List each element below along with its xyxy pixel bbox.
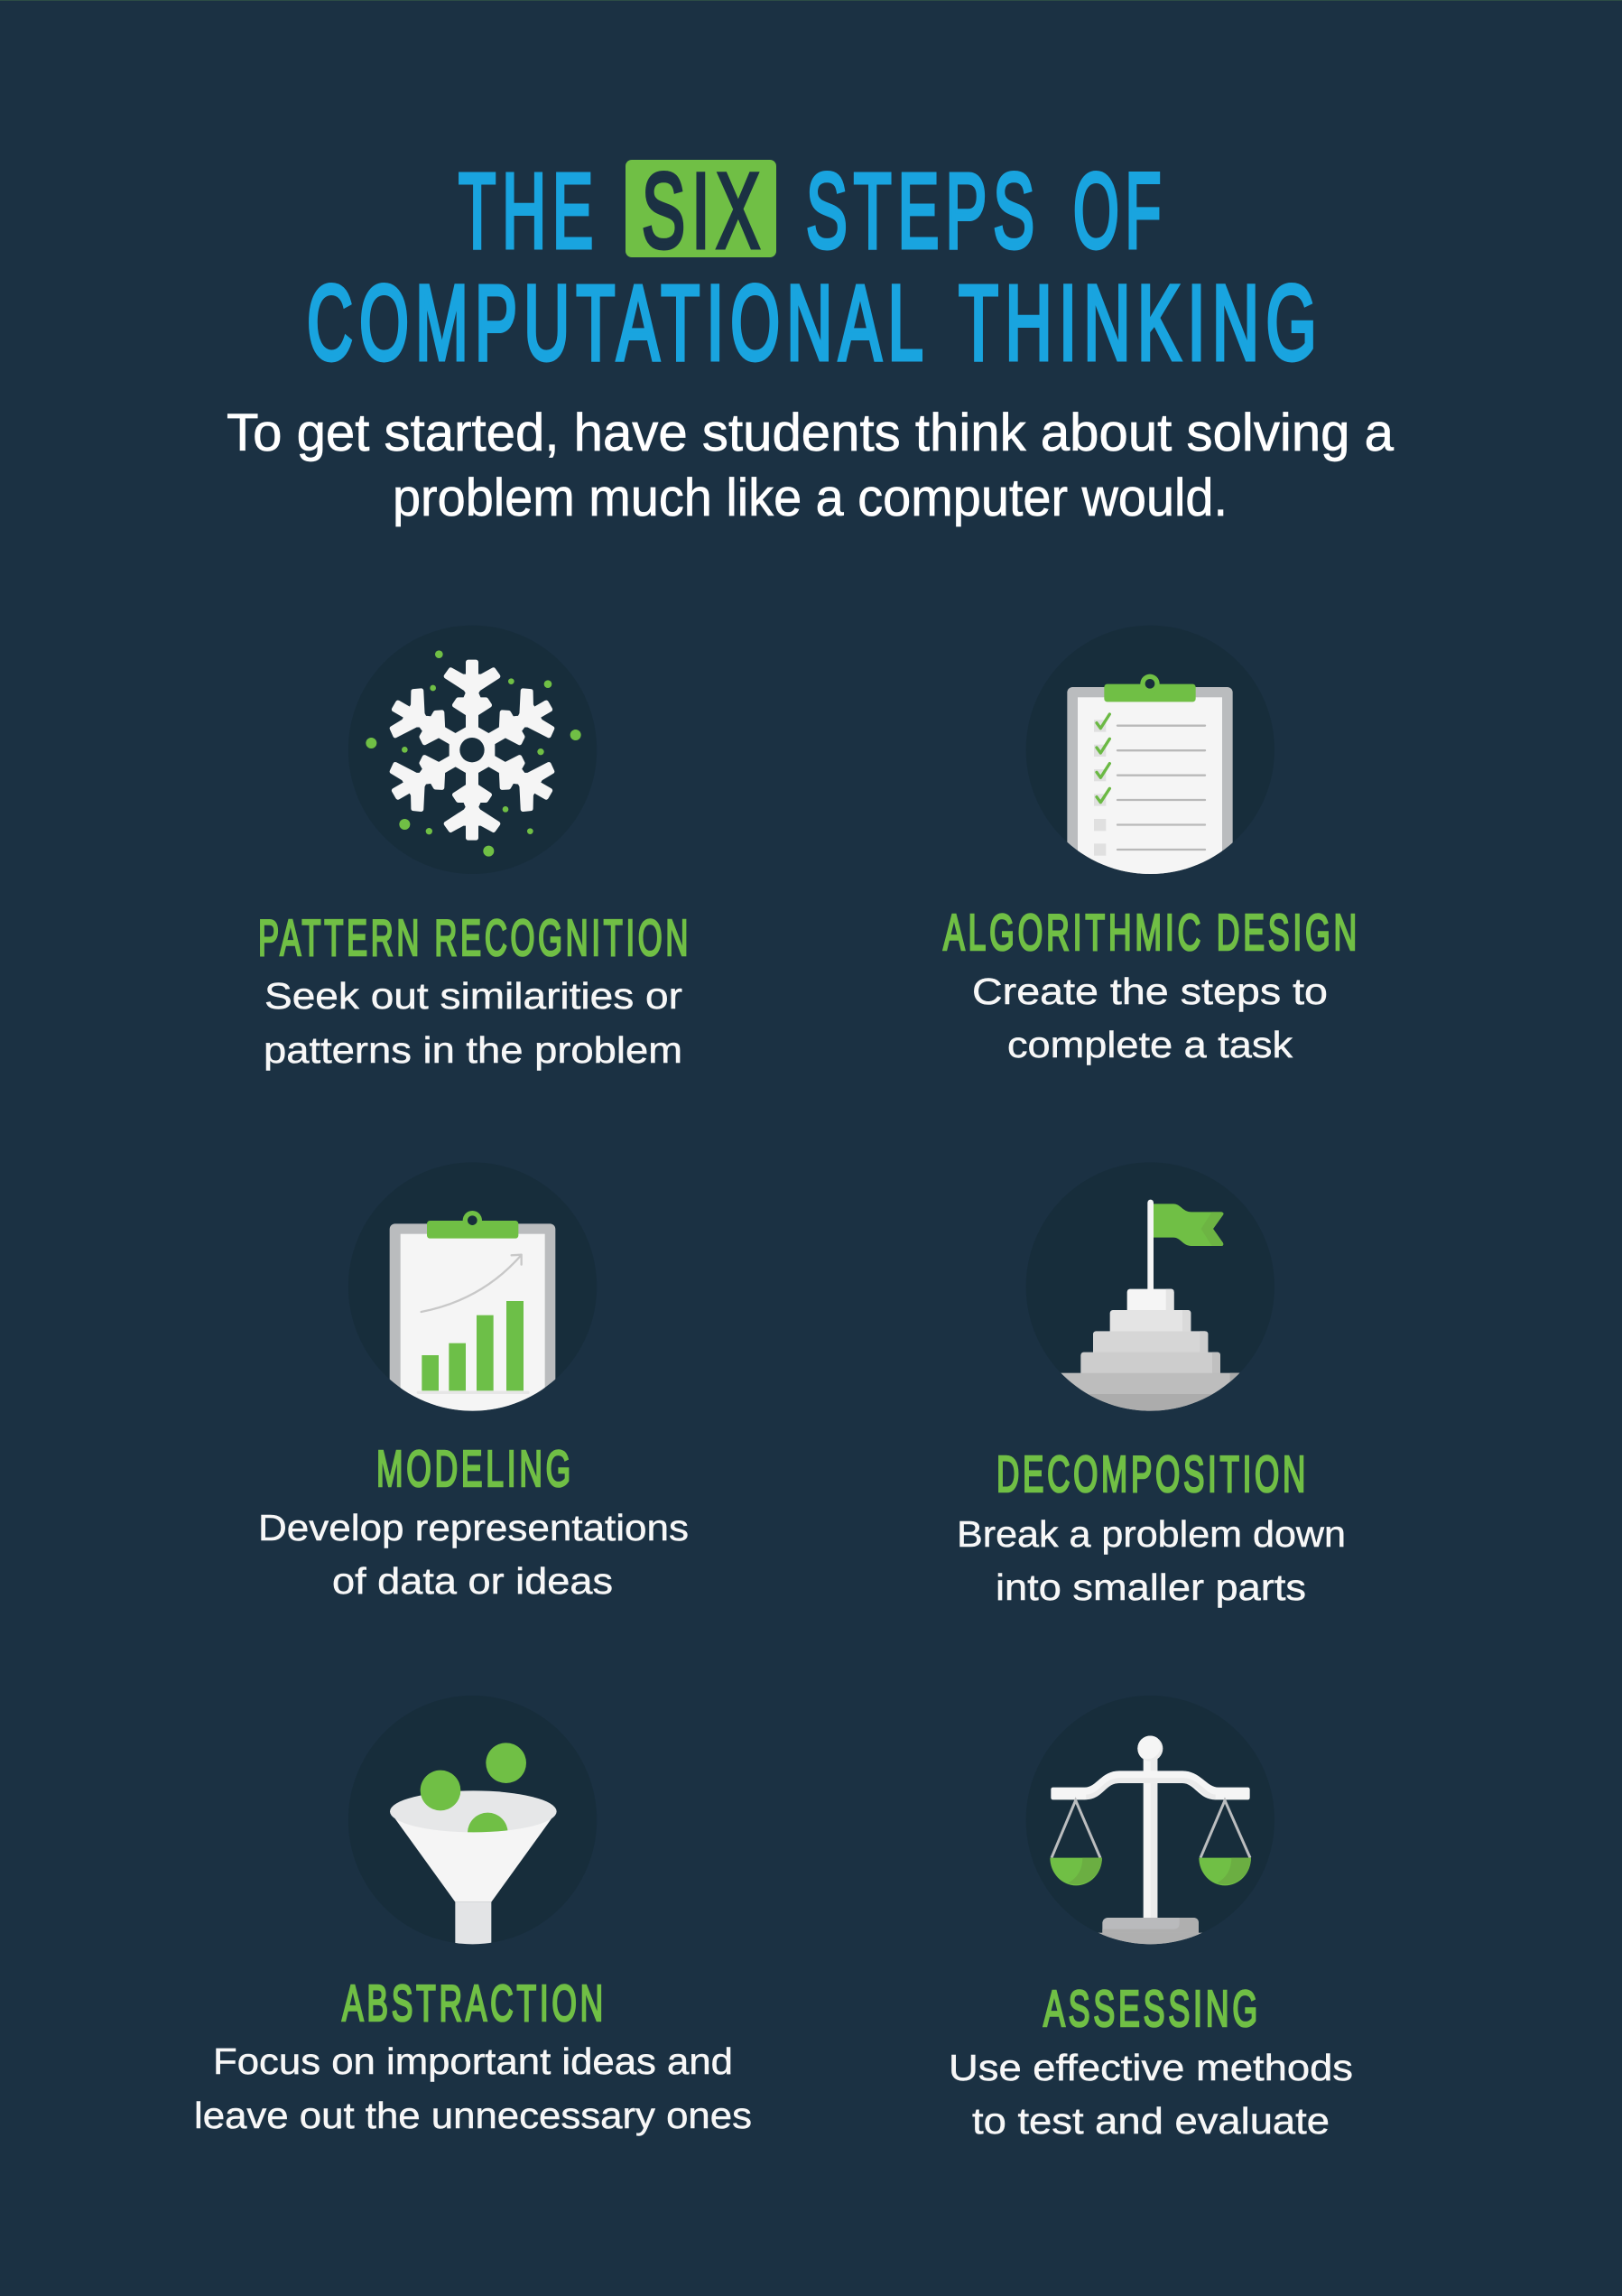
description: assessing [949,2047,1353,2142]
description: modeling: Develop representations [258,1507,689,1548]
panel: assessing [949,1696,1353,2142]
heading: assessing: ASSESSING [1043,1980,1261,2038]
description: abstraction: leave out the unnecessary ones [194,2095,752,2136]
description: pattern recognition: Seek out similarities or [264,975,682,1017]
icon: flag on stepped pyramid [1026,1162,1274,1412]
subtitle: To get started, have students think about solving a [227,404,1395,462]
description: abstraction [194,2040,752,2136]
title: COMPUTATIONAL [307,264,930,383]
description: modeling: of data or ideas [332,1560,613,1602]
highlighted word: six [626,152,776,271]
highlighted word: six: SIX [642,152,766,271]
title: OF [1073,152,1167,271]
description: abstraction: Focus on important ideas and [213,2040,733,2082]
title: THINKING [959,264,1323,383]
heading: decomposition: DECOMPOSITION [996,1445,1309,1503]
panel: abstraction [194,1696,752,2136]
heading: abstraction: ABSTRACTION [342,1975,607,2032]
description: algorithmic design: complete a task [1007,1024,1293,1065]
subtitle [227,404,1395,527]
description: decomposition: Break a problem down [957,1513,1346,1555]
icon: chart clipboard [348,1162,597,1435]
icon: funnel with balls [348,1696,597,1947]
description: algorithmic design: Create the steps to [972,971,1328,1012]
panel: modeling [258,1162,689,1602]
description: modeling [258,1507,689,1602]
heading: algorithmic design: ALGORITHMIC DESIGN [943,904,1360,962]
panel: pattern recognition [258,626,691,1071]
description: assessing: to test and evaluate [972,2100,1330,2142]
panel: decomposition [957,1162,1346,1608]
description: decomposition [957,1513,1346,1608]
title [307,152,1323,383]
subtitle: problem much like a computer would. [393,469,1228,527]
description: pattern recognition [264,975,682,1071]
description: pattern recognition: patterns in the problem [264,1029,682,1071]
heading: pattern recognition: PATTERN RECOGNITION [258,909,691,967]
heading: modeling: MODELING [376,1440,574,1498]
title: THE [459,152,599,271]
icon: checklist clipboard [1027,627,1273,874]
description: decomposition: into smaller parts [996,1566,1306,1608]
icon: balance scale [1026,1696,1274,1947]
description: assessing: Use effective methods [949,2047,1353,2088]
icon: snowflake [348,626,597,874]
panel: algorithmic design [943,626,1360,1065]
title: STEPS [806,152,1041,271]
description: algorithmic design [972,971,1328,1065]
